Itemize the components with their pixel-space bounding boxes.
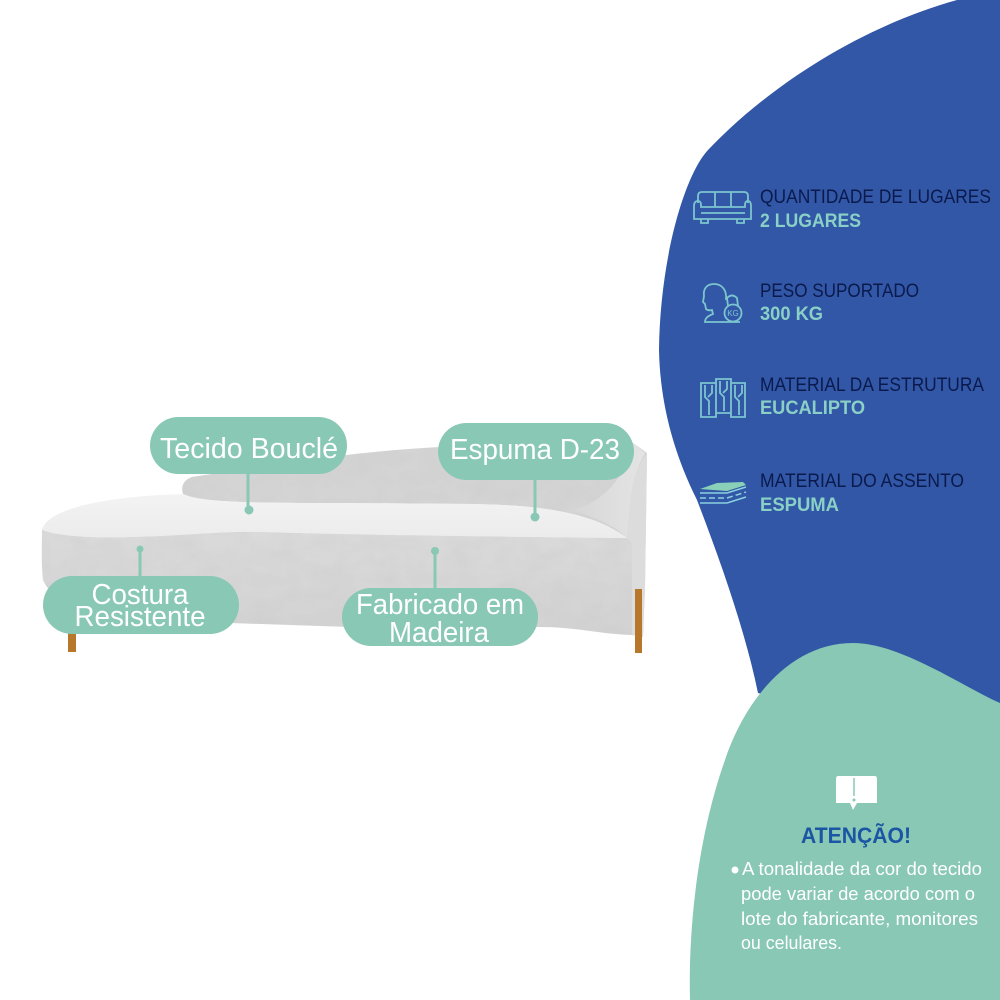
text: 300 kg: 300 KG	[760, 304, 823, 325]
callout: Fabricado em Madeira	[342, 547, 538, 649]
sofa front texture	[40, 530, 635, 640]
sofa backrest texture	[180, 440, 650, 640]
spec: seat material	[700, 470, 964, 516]
callout: Espuma D-23: Espuma D-23	[450, 434, 620, 466]
callout: Fabricado em Madeira: Madeira	[389, 617, 490, 649]
callout: Costura Resistente: Resistente	[74, 601, 206, 633]
text: note: ou celulares.	[741, 933, 842, 953]
text: peso suportado: PESO SUPORTADO	[760, 280, 919, 302]
sofa legs	[68, 589, 642, 653]
callout: Espuma D-23	[438, 423, 634, 522]
callout: Fabricado em Madeira: Fabricado em	[356, 589, 524, 621]
sofa backrest	[182, 443, 647, 637]
text: 2 lugares: 2 LUGARES	[760, 211, 861, 232]
callout: Costura Resistente	[43, 546, 239, 634]
icon: foam layers	[700, 482, 746, 503]
callout: Tecido Bouclé: Tecido Bouclé	[160, 433, 338, 465]
sofa inner arm	[570, 443, 645, 538]
text: material do assento: MATERIAL DO ASSENTO	[760, 470, 964, 492]
text: note: A tonalidade da cor do tecido	[742, 859, 982, 879]
sofa	[40, 417, 650, 653]
spec: seats	[694, 186, 991, 232]
mint attention shape	[690, 643, 1000, 1000]
text: espuma: ESPUMA	[760, 495, 839, 516]
text: note	[732, 859, 982, 953]
spec: structure	[701, 374, 984, 419]
text: note: lote do fabricante, monitores	[741, 909, 978, 929]
icon: wood planks	[701, 379, 745, 417]
text: KG: KG	[727, 309, 739, 318]
icon: head with weight	[703, 284, 742, 322]
sofa seat	[42, 494, 627, 538]
icon: sofa	[694, 192, 751, 223]
text: note: pode variar de acordo com o	[741, 884, 975, 904]
sofa outer side	[627, 453, 647, 637]
callout: Tecido Bouclé	[150, 417, 347, 514]
spec: weight	[703, 280, 919, 325]
attention block	[732, 776, 982, 953]
blue background shape	[659, 0, 1000, 760]
icon: alert note	[836, 776, 877, 810]
sofa front	[42, 530, 632, 635]
heading: atenção: ATENÇÃO!	[801, 823, 911, 848]
text: eucalipto: EUCALIPTO	[760, 398, 865, 419]
callout: Costura Resistente: Costura	[92, 579, 189, 611]
